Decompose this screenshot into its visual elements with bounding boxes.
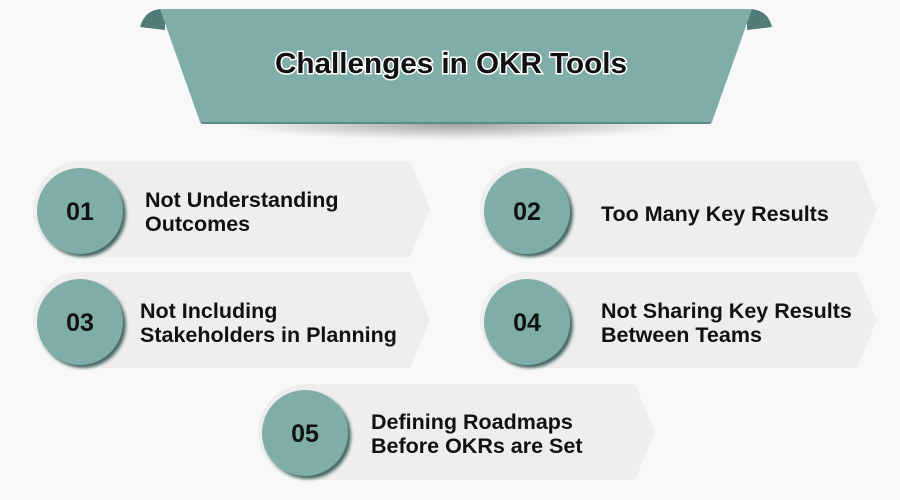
text 05: Defining Roadmaps xyxy=(371,410,573,434)
text 04: Not Sharing Key Results xyxy=(601,299,852,323)
text 03: Stakeholders in Planning xyxy=(140,323,397,347)
text 01: Outcomes xyxy=(145,212,250,236)
badge 01 xyxy=(37,168,123,254)
text 03: Not Including xyxy=(140,299,277,323)
badge 03 xyxy=(37,279,123,365)
text 02: Too Many Key Results xyxy=(601,202,829,226)
card 03 xyxy=(33,272,430,368)
badge 03: 03 xyxy=(66,309,94,337)
badge 01: 01 xyxy=(66,198,94,226)
card 05 xyxy=(258,384,655,480)
badge 02: 02 xyxy=(513,198,541,226)
text 01: Not Understanding xyxy=(145,188,338,212)
badge 05 xyxy=(262,390,348,476)
title banner xyxy=(140,9,772,140)
text 05: Before OKRs are Set xyxy=(371,434,582,458)
badge 04: 04 xyxy=(513,309,541,337)
card 01 xyxy=(33,161,430,257)
text 04: Between Teams xyxy=(601,323,762,347)
badge 05: 05 xyxy=(291,420,319,448)
badge 04 xyxy=(484,279,570,365)
card 02 xyxy=(480,161,877,257)
card 04 xyxy=(480,272,877,368)
title: Challenges in OKR Tools xyxy=(275,48,627,80)
badge 02 xyxy=(484,168,570,254)
